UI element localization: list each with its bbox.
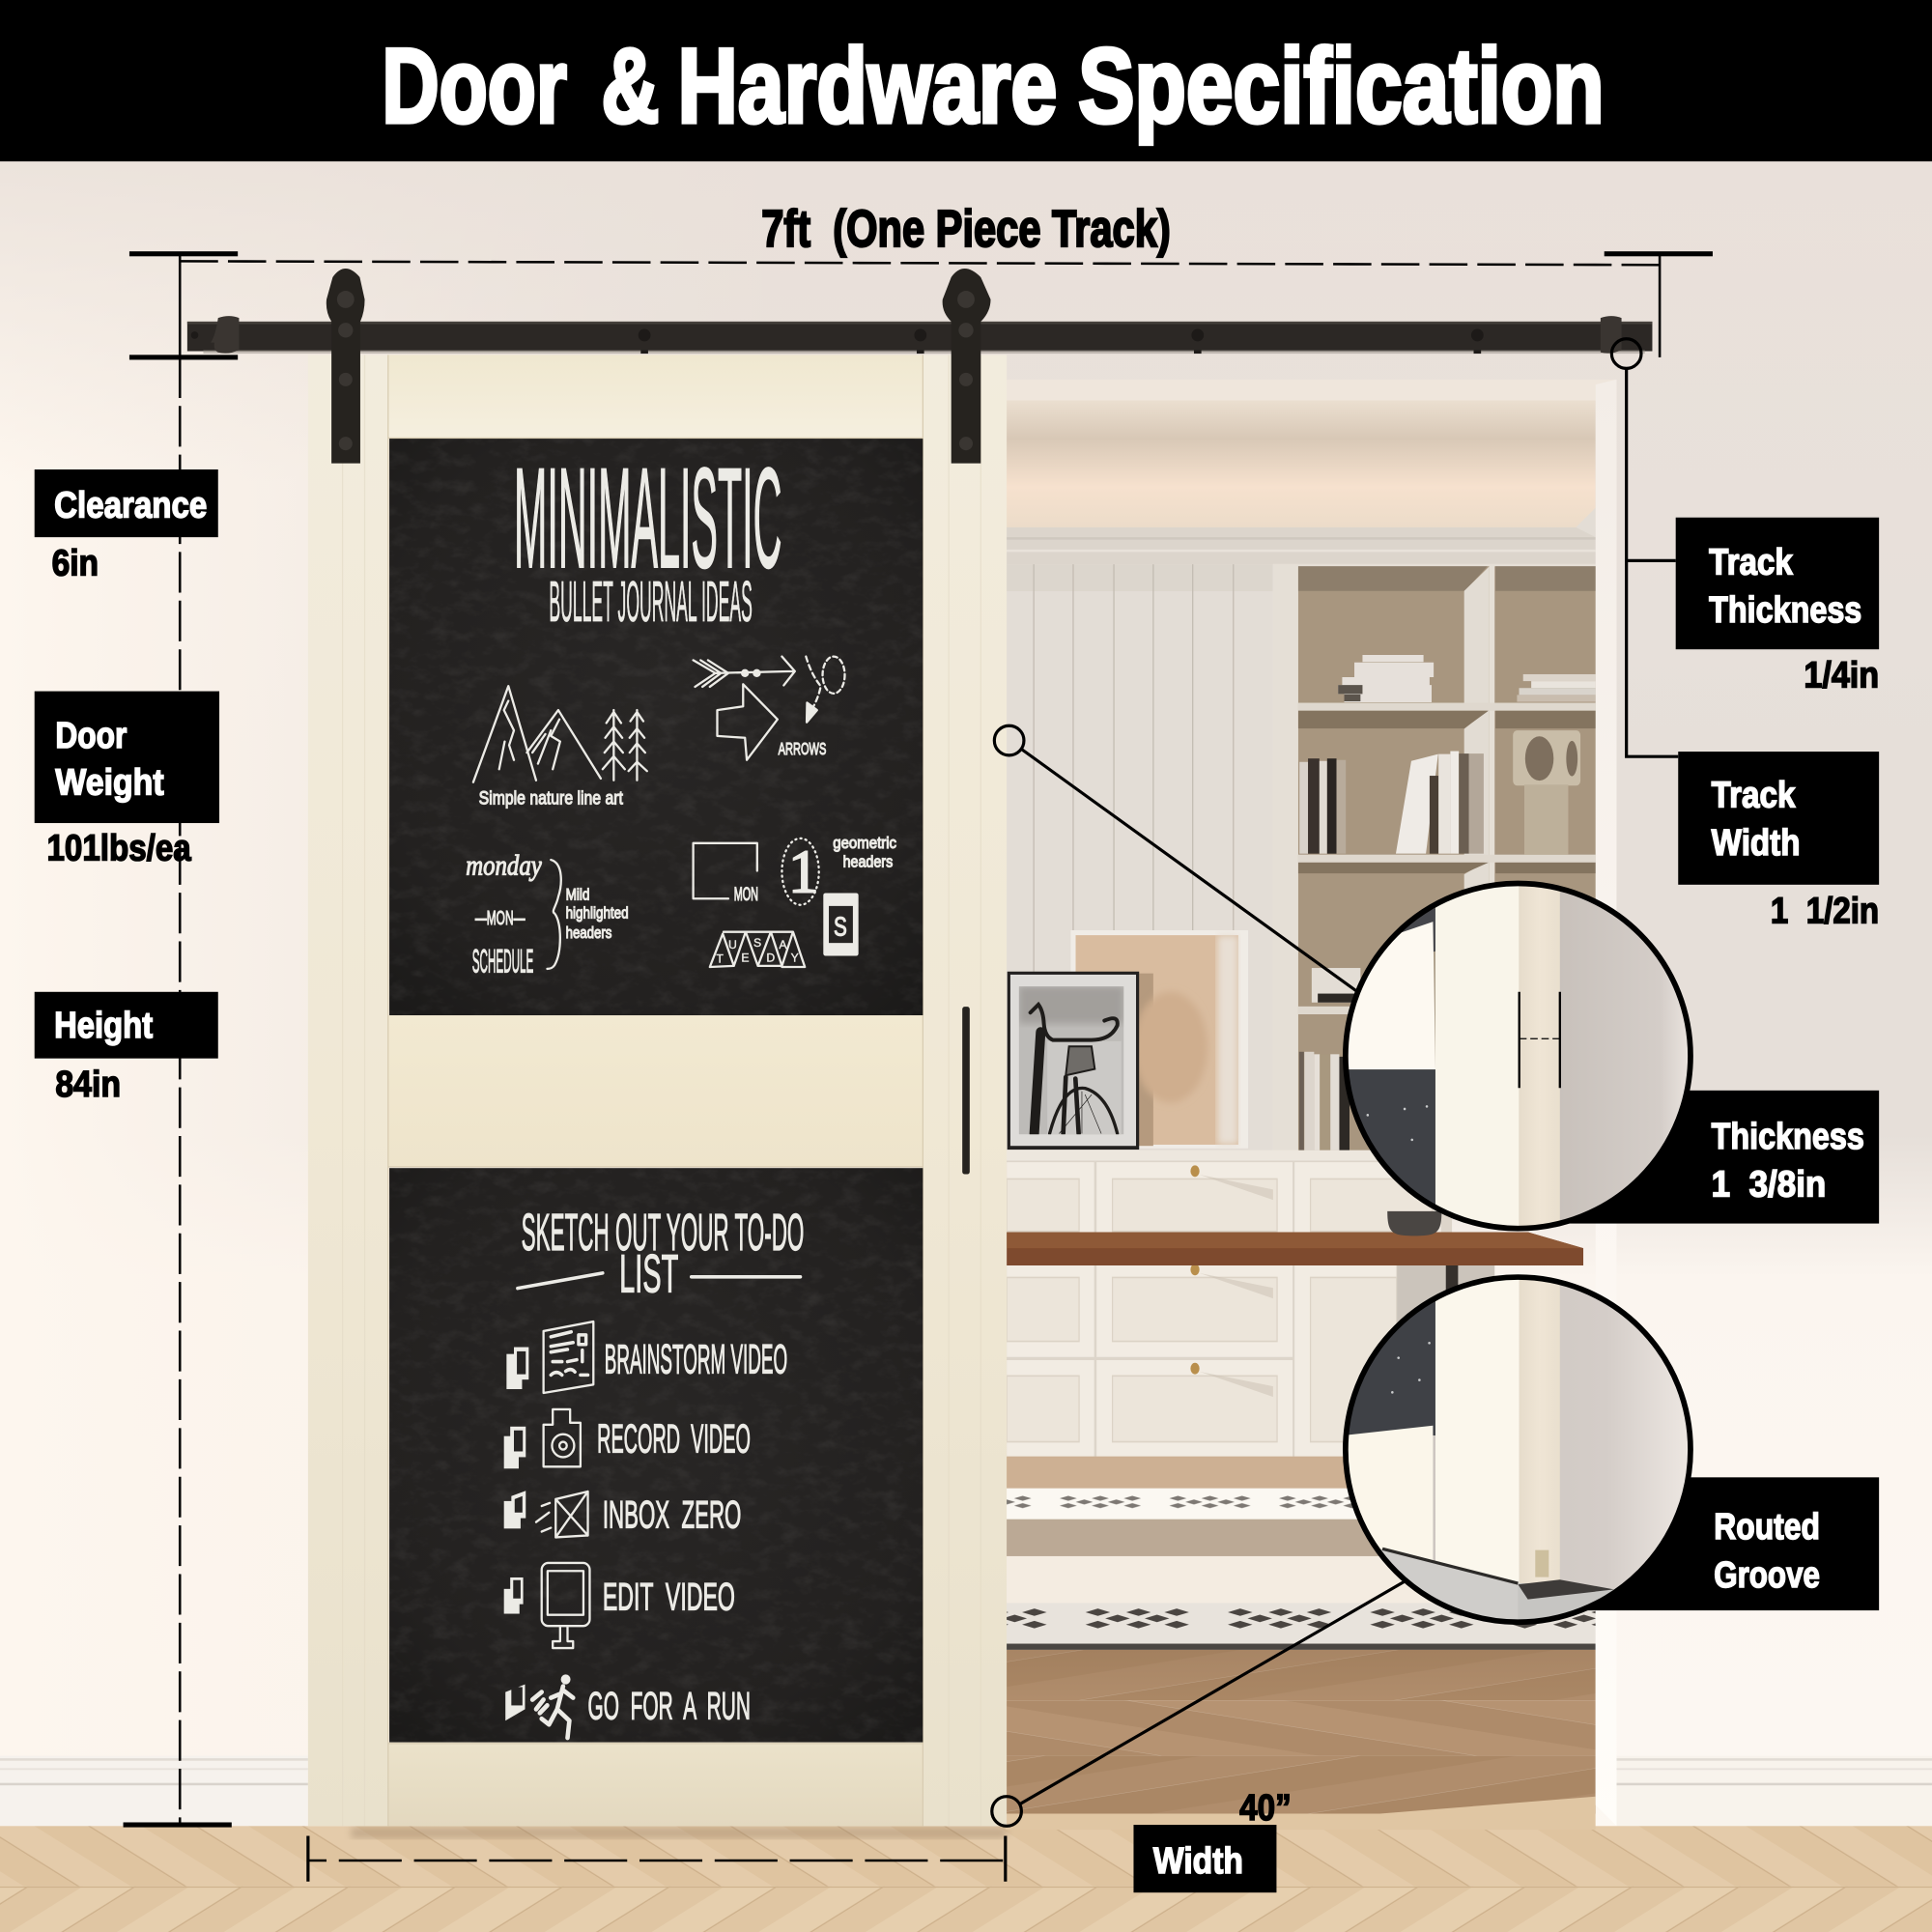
label: mild highlighted headers: headers <box>566 923 611 942</box>
doorway opening with room interior <box>1005 380 1616 1836</box>
label: door weight: Weight <box>55 762 164 804</box>
thickness marker <box>1520 992 1560 1088</box>
title <box>382 27 1605 145</box>
label: thickness <box>1528 1091 1879 1224</box>
heading: sketch out your to-do list <box>518 1204 804 1304</box>
label: mild highlighted headers <box>566 885 629 942</box>
track callout leader <box>1611 339 1678 756</box>
door shadow on floor <box>352 1828 1007 1838</box>
mountains and trees <box>473 686 647 782</box>
chalkboard: upper panel: BULLET JOURNAL IDEAS <box>549 569 753 634</box>
label: routed groove <box>1528 1477 1879 1610</box>
lower shelf books <box>1299 968 1362 1151</box>
tuesday bunting <box>710 932 805 967</box>
door handle <box>962 1007 970 1175</box>
label: track width: Width <box>1712 822 1801 864</box>
item: brainstorm video <box>506 1321 787 1393</box>
chalkboard: lower panel: SKETCH OUT YOUR TO-DO <box>522 1204 804 1262</box>
chalkboard: upper panel: SCHEDULE <box>472 944 533 980</box>
door height dimension <box>124 357 232 1828</box>
table top <box>1007 1211 1583 1265</box>
panelled wall <box>1007 564 1273 972</box>
bookcase <box>1273 564 1599 1157</box>
label: track thickness: 1/4in <box>1804 655 1879 696</box>
chalkboard: lower panel <box>389 1168 923 1743</box>
foreground wood floor <box>0 1826 1932 1932</box>
label: door weight: 101lbs/ea <box>46 827 191 868</box>
cabinets <box>1005 1151 1494 1462</box>
upright books: right group <box>1396 752 1484 854</box>
title: Hardware <box>678 27 1057 145</box>
hanger: right <box>943 269 991 464</box>
S tile: S <box>834 911 847 941</box>
tuesday bunting: Y <box>791 951 799 964</box>
chalkboard: lower panel: RECORD VIDEO <box>597 1416 751 1462</box>
item: record video <box>504 1409 751 1468</box>
label: height: Height <box>54 1005 153 1046</box>
tuesday bunting: U <box>728 938 737 952</box>
sliding track <box>187 316 1652 354</box>
label: clearance: Clearance <box>54 485 207 526</box>
chalkboard: lower panel: BRAINSTORM VIDEO <box>605 1336 787 1382</box>
barn door <box>308 355 1007 1826</box>
book stack: top shelf <box>1338 655 1434 702</box>
label: width: 40” <box>1239 1787 1292 1829</box>
rails <box>388 355 923 1826</box>
item: edit video: EDIT VIDEO <box>603 1577 735 1619</box>
item: go for a run <box>505 1674 751 1738</box>
hanger: left <box>327 269 365 464</box>
item: inbox zero: INBOX ZERO <box>603 1494 741 1537</box>
item: go for a run: GO FOR A RUN <box>588 1686 751 1727</box>
label: clearance <box>35 469 218 584</box>
label: width <box>1133 1787 1292 1892</box>
heading: sketch out your to-do list: LIST <box>619 1244 678 1304</box>
label: thickness: 1 3/8in <box>1712 1164 1826 1206</box>
title: Door <box>382 27 567 145</box>
bicycle photo <box>1008 972 1139 1150</box>
label: track width: 1 1/2in <box>1771 890 1879 931</box>
right stop <box>1601 316 1622 354</box>
room floor <box>1006 1650 1596 1836</box>
label: track thickness: Thickness <box>1709 589 1861 631</box>
label: mild highlighted headers: Mild <box>566 885 589 903</box>
label: height: 84in <box>55 1064 121 1105</box>
title: Specification <box>1078 27 1605 145</box>
monday heading sample <box>466 849 542 980</box>
monday heading sample: —MON— <box>475 907 526 929</box>
label: routed groove: Routed <box>1714 1506 1820 1548</box>
door width dimension <box>308 1836 1006 1882</box>
door thickness leader <box>994 725 1363 996</box>
label: door weight: Door <box>55 715 127 756</box>
picture frames <box>1008 930 1248 1150</box>
detail circle: routed groove <box>1343 1275 1694 1638</box>
label: width: Width <box>1153 1840 1243 1882</box>
open box header: MON <box>734 885 758 905</box>
stiles <box>308 355 1007 1826</box>
track bolts <box>191 329 1484 354</box>
tuesday bunting: D <box>766 951 775 964</box>
label: nature line art: Simple nature line art <box>479 789 623 810</box>
watercolor print <box>1070 930 1248 1149</box>
label: track width: Track <box>1712 774 1796 815</box>
title: & <box>601 27 659 145</box>
label: track thickness: Track <box>1709 541 1793 582</box>
dotted number: 1 <box>788 838 819 906</box>
item: inbox zero <box>504 1491 741 1537</box>
label: geometric headers: headers <box>843 853 893 871</box>
book stack: top right shelf <box>1517 674 1596 702</box>
label: geometric headers: geometric <box>833 834 896 852</box>
barn door: MINIMALISTIC <box>514 440 781 598</box>
label: height <box>35 992 218 1105</box>
tuesday bunting: E <box>741 951 750 964</box>
floor behind rug <box>1007 1457 1347 1489</box>
track length dimension <box>129 201 1713 357</box>
bowl <box>1387 1211 1441 1236</box>
brace <box>547 860 561 969</box>
label: geometric headers <box>833 834 896 871</box>
S tile <box>823 893 859 956</box>
label: clearance: 6in <box>52 543 99 584</box>
tuesday bunting: A <box>779 938 787 952</box>
crown moulding <box>1006 508 1596 564</box>
clearance tick <box>129 355 238 359</box>
routed groove leader <box>992 1577 1412 1826</box>
left stop <box>211 316 239 354</box>
open box header <box>694 843 758 905</box>
label: track thickness <box>1676 518 1879 696</box>
label: track width <box>1678 752 1879 931</box>
label: routed groove: Groove <box>1714 1554 1820 1596</box>
label: door weight <box>35 692 219 868</box>
chalkboard: upper panel <box>389 439 923 1015</box>
door jamb <box>1596 380 1616 1826</box>
sculpture <box>1513 730 1580 855</box>
label: mild highlighted headers: highlighted <box>566 904 629 923</box>
item: edit video <box>504 1563 735 1648</box>
arrow doodles <box>694 657 844 760</box>
tuesday bunting: S <box>753 936 761 950</box>
rug <box>1006 1489 1596 1650</box>
ceiling glow <box>1006 401 1596 527</box>
upright books: left group <box>1299 758 1346 854</box>
track length dimension: 7ft (One Piece Track) <box>761 201 1171 258</box>
label: thickness: Thickness <box>1712 1116 1864 1157</box>
detail circle: door thickness <box>1343 881 1694 1233</box>
title band <box>0 0 1932 161</box>
monday heading sample: monday <box>466 849 542 881</box>
tuesday bunting: T <box>716 952 724 965</box>
label: arrows: ARROWS <box>779 739 826 758</box>
